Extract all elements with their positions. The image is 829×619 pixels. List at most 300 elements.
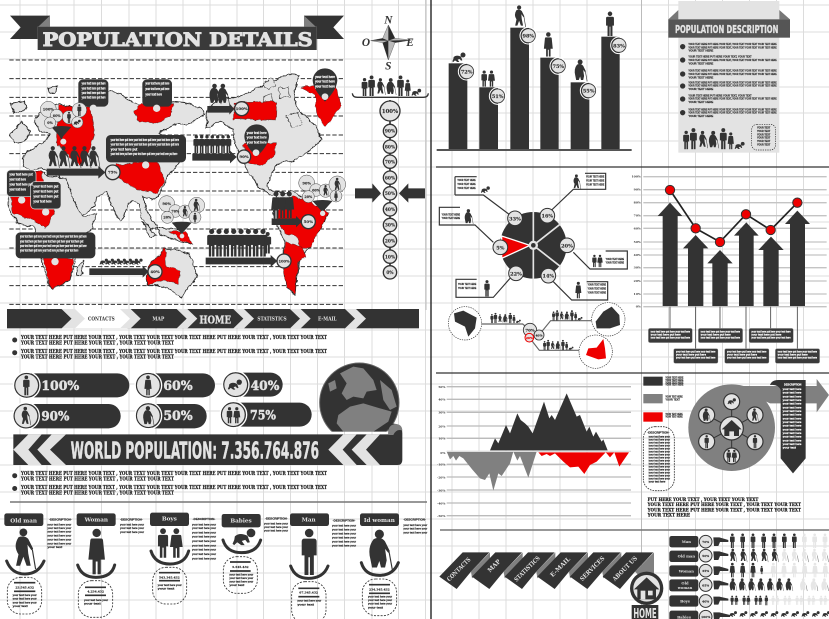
globe bbox=[319, 362, 400, 432]
side descriptions: your text here your bbox=[332, 540, 357, 544]
category labels: Man bbox=[302, 517, 316, 523]
stat numbers: 543.345.432 bbox=[159, 575, 180, 579]
people table: Woman bbox=[678, 569, 694, 573]
side descriptions: your text here your bbox=[47, 534, 72, 538]
pie chart: YOUR TEXT HERE bbox=[588, 292, 606, 295]
pie chart: YOUR TEXT HERE bbox=[442, 214, 460, 217]
callout text: your text here put here bbox=[82, 82, 106, 86]
stat numbers: your text here your bbox=[297, 599, 321, 603]
callout pins bbox=[18, 93, 328, 265]
side descriptions: -DESCRIPTION- bbox=[265, 516, 288, 520]
callout text: your text here put bbox=[33, 195, 59, 199]
mountain chart: 30% bbox=[438, 411, 445, 415]
arrow chart: your text here put here bbox=[778, 354, 808, 357]
callout text: your text here put here your text here put here your text here put here bbox=[111, 152, 177, 156]
arrow chart: 100% bbox=[632, 175, 641, 179]
stat numbers: your text bbox=[229, 583, 244, 587]
arrow chart: your text here put here your text here bbox=[778, 351, 818, 354]
description box: -DESCRIPTION- bbox=[647, 430, 669, 434]
bookmark ribbon: your text here bbox=[783, 409, 802, 413]
population description panel: YOUR TEXT HERE PUT HERE YOUR TEXT, YOUR TEXT YOUR TEXT YOUR TEXT HERE bbox=[688, 69, 777, 73]
arrow chart bbox=[632, 175, 827, 363]
people table: Old man bbox=[678, 555, 695, 559]
pie chart: YOUR TEXT HERE bbox=[588, 284, 606, 287]
arrow chart: your text here put here your text here bbox=[651, 336, 691, 339]
side descriptions: your text here your bbox=[192, 530, 217, 534]
bar chart: 51% bbox=[492, 94, 504, 100]
navigation bar: STATISTICS bbox=[257, 317, 287, 323]
side descriptions: -DESCRIPTION- bbox=[49, 518, 72, 522]
callout text: your text here put bbox=[33, 190, 59, 194]
arrows pointing at 50% bbox=[355, 183, 425, 203]
bookmark ribbon: DESCRIPTION bbox=[784, 383, 801, 387]
bar chart: 98% bbox=[522, 34, 534, 40]
people table: 35% bbox=[702, 569, 709, 573]
text block 2 bbox=[12, 471, 327, 496]
diagonal menu: CONTACTS bbox=[446, 556, 472, 583]
population description panel: YOUR TEXT HERE PUT HERE YOUR TEXT, YOUR TEXT YOUR TEXT YOUR TEXT HERE bbox=[688, 111, 777, 115]
description box: your text here your bbox=[649, 435, 670, 438]
arrow chart: your text here put here your text here bbox=[727, 357, 767, 360]
bookmark ribbon: your text here bbox=[783, 394, 802, 398]
map pointer arrows bbox=[47, 103, 302, 278]
map callouts bbox=[7, 68, 337, 258]
side descriptions bbox=[47, 516, 428, 560]
people table: Old bbox=[681, 581, 689, 585]
population description panel: YOUR TEXT HERE PUT HERE YOUR TEXT, YOUR TEXT YOUR TEXT YOUR TEXT HERE bbox=[688, 45, 777, 49]
people table bbox=[669, 533, 829, 619]
arrow chart: your text here put here bbox=[751, 333, 782, 336]
panel: pie diagram and arrow chart bbox=[439, 173, 827, 368]
bubble icons and labels: 90% bbox=[302, 181, 311, 185]
bookmark ribbon: your text here bbox=[783, 438, 802, 442]
population description panel: YOUR TEXT HERE bbox=[688, 114, 713, 118]
side descriptions: your text here your bbox=[120, 526, 145, 530]
bubble icons and labels: 70% bbox=[171, 209, 180, 213]
arrow chart: your text here put here your text here bbox=[778, 357, 818, 360]
rocker bases bbox=[7, 540, 398, 578]
percentage scale: 70% bbox=[385, 160, 395, 165]
bubble icons and labels: 60% bbox=[312, 188, 321, 192]
stat numbers: 3.345.432 bbox=[232, 565, 249, 569]
callout text: your text here put bbox=[111, 147, 138, 151]
compass: N bbox=[383, 14, 393, 26]
stat numbers: your text here your bbox=[229, 576, 253, 580]
paragraph: PUT HERE YOUR TEXT , YOUR TEXT YOUR TEXT bbox=[648, 497, 759, 502]
map percent labels: 40% bbox=[150, 269, 160, 274]
side descriptions: your text here your bbox=[332, 531, 357, 535]
mountain chart: 0% bbox=[440, 451, 445, 455]
bubble icons and labels: 90% bbox=[162, 202, 171, 206]
side descriptions: your text here your bbox=[192, 522, 217, 526]
bubble icons and labels: 60% bbox=[53, 114, 61, 118]
map percent labels: 100% bbox=[278, 259, 290, 263]
pie chart: 14% bbox=[542, 274, 554, 280]
side descriptions: your text here your bbox=[192, 543, 217, 547]
description box: your text here your bbox=[649, 477, 670, 480]
description box: your text here your bbox=[649, 444, 670, 447]
mountain chart: -40% bbox=[437, 501, 445, 505]
panel: top bar chart and description bbox=[437, 1, 790, 153]
stat numbers: your text here your bbox=[13, 593, 37, 597]
category labels: Boys bbox=[162, 517, 177, 523]
population description panel: YOUR TEXT HERE bbox=[688, 100, 713, 104]
stat numbers: your text here your bbox=[368, 594, 392, 598]
percentage scale: 80% bbox=[385, 145, 395, 150]
map percent labels: 100% bbox=[236, 106, 248, 111]
percentage scale: 20% bbox=[385, 239, 395, 244]
population description panel: YOUR TEXT bbox=[757, 142, 771, 146]
population description panel: YOUR TEXT HERE bbox=[688, 61, 713, 65]
legend: YOUR TEXT HERE bbox=[665, 381, 683, 385]
category labels: Id woman bbox=[364, 518, 395, 524]
pie chart: YOUR TEXT HERE bbox=[588, 288, 606, 291]
bookmark ribbon: your text here bbox=[783, 387, 802, 391]
pie chart: YOUR TEXT HERE bbox=[458, 287, 477, 290]
paragraph: YOUR TEXT HERE PUT HERE YOUR TEXT , YOUR TEXT YOUR TEXT bbox=[647, 507, 802, 512]
bar chart: 55% bbox=[583, 89, 595, 95]
title banner bbox=[10, 16, 344, 51]
mountain chart: 10% bbox=[438, 437, 445, 441]
percentage scale: 90% bbox=[385, 130, 395, 135]
description box: your text here your bbox=[649, 447, 670, 450]
stat numbers: your text here your bbox=[84, 598, 108, 602]
diagonal menu: ABOUT US bbox=[611, 555, 639, 583]
arrow chart: 80% bbox=[634, 201, 641, 205]
population description panel: YOUR TEXT bbox=[757, 132, 771, 136]
bar chart: 72% bbox=[461, 70, 473, 76]
mountain chart: -30% bbox=[437, 488, 445, 492]
description box: your text here your bbox=[649, 465, 670, 468]
side descriptions: your text here your bbox=[264, 529, 289, 533]
bubble icons and labels bbox=[43, 104, 341, 223]
bookmark ribbon: your text here bbox=[783, 416, 802, 420]
percentage pills bbox=[13, 371, 312, 429]
callout text: your text here bbox=[247, 131, 267, 135]
callout text: your text here bbox=[315, 84, 335, 88]
pie chart: YOUR TEXT HERE bbox=[606, 261, 624, 264]
side descriptions: your text here your bbox=[403, 531, 428, 535]
text block 2: YOUR TEXT HERE PUT HERE YOUR TEXT , YOUR TEXT YOUR TEXT bbox=[20, 490, 174, 496]
stat numbers: your text here your bbox=[13, 596, 37, 600]
dashed stat blobs bbox=[7, 557, 397, 619]
callout text: your text here put here bbox=[145, 87, 169, 91]
side descriptions: your text here your bbox=[120, 522, 145, 526]
pie chart: 16% bbox=[541, 214, 553, 220]
callout text: your text here put here bbox=[82, 86, 106, 90]
population description panel: YOUR TEXT bbox=[757, 126, 771, 130]
side descriptions: your text here your bbox=[403, 523, 428, 527]
bar chart bbox=[437, 5, 632, 151]
stat numbers: your text bbox=[158, 587, 175, 591]
stat numbers: your text bbox=[297, 602, 314, 606]
title banner: POPULATION DETAILS bbox=[43, 29, 313, 51]
population description panel: YOUR TEXT HERE PUT HERE YOUR TEXT, YOUR TEXT bbox=[688, 54, 752, 58]
bookmark ribbon bbox=[770, 380, 806, 473]
arrow chart: 10% bbox=[634, 292, 641, 296]
side descriptions: your text here your bbox=[332, 524, 357, 528]
map bubble clusters bbox=[40, 101, 346, 223]
percentage pills: 75% bbox=[250, 407, 276, 423]
callout text: your text here put here your text here put here your text here put here bbox=[111, 143, 179, 147]
callout text: your text here put here your text here put here your text here put here bbox=[20, 244, 87, 248]
arrow chart: 40% bbox=[634, 253, 641, 257]
description box: your text here your bbox=[649, 450, 670, 453]
pie chart: YOUR TEXT HERE bbox=[457, 179, 476, 182]
bubble icons and labels: 0% bbox=[47, 121, 54, 125]
population description panel: YOUR TEXT HERE PUT HERE YOUR TEXT, YOUR TEXT YOUR TEXT YOUR TEXT HERE bbox=[688, 84, 777, 88]
percentage pills: 90% bbox=[41, 409, 70, 425]
description box: your text here your bbox=[649, 471, 670, 474]
side descriptions: your text here your bbox=[192, 539, 217, 543]
side descriptions: your text here your bbox=[120, 530, 145, 534]
paragraph: YOUR TEXT HERE bbox=[647, 512, 690, 517]
legend: YOUR TEXT HERE bbox=[665, 383, 683, 387]
bookmark ribbon: your text here bbox=[783, 435, 802, 439]
bookmark ribbon: your text here bbox=[783, 402, 802, 406]
arrow chart: your text here put here bbox=[727, 354, 758, 357]
navigation bar bbox=[7, 309, 419, 328]
legend: YOUR TEXT HERE bbox=[665, 412, 683, 416]
red countries bbox=[11, 83, 342, 294]
arrow chart: 0% bbox=[636, 305, 641, 309]
panel: navigation and stats bbox=[7, 309, 419, 496]
population description panel: YOUR TEXT HERE PUT HERE YOUR TEXT, YOUR TEXT YOUR TEXT YOUR TEXT HERE bbox=[688, 58, 777, 62]
stat numbers: your text bbox=[84, 602, 101, 606]
panel: population details map bbox=[7, 14, 428, 304]
text block 1: YOUR TEXT HERE PUT HERE YOUR TEXT , YOUR TEXT YOUR TEXT YOUR TEXT HERE PUT HERE YOUR TEXT , YOUR TEXT YOUR TEXT bbox=[20, 349, 327, 355]
people table: 50% bbox=[702, 554, 709, 558]
arrow chart: your text here put here your text here bbox=[676, 351, 716, 354]
category labels: Babies bbox=[230, 519, 252, 525]
pie chart: YOUR TEXT HERE bbox=[586, 176, 605, 179]
description box bbox=[643, 427, 674, 491]
percentage pills: 100% bbox=[41, 378, 80, 394]
panel: mountain chart and icon wheel bbox=[437, 375, 829, 518]
bookmark ribbon: your text here bbox=[783, 427, 802, 431]
legend: YOUR TEXT bbox=[665, 397, 680, 401]
bookmark ribbon: your text here bbox=[783, 405, 802, 409]
arrow chart: your text here put here your text here bbox=[676, 357, 716, 360]
side descriptions: your text here your bbox=[264, 521, 289, 525]
mountain chart: -20% bbox=[437, 475, 445, 479]
side descriptions: your text here your bbox=[47, 530, 72, 534]
stat numbers: your text here your bbox=[13, 600, 37, 604]
percentage scale: 10% bbox=[385, 255, 395, 260]
population description panel: YOUR TEXT HERE bbox=[688, 75, 713, 79]
people table: woman bbox=[677, 586, 693, 590]
percentage scale: 50% bbox=[385, 192, 395, 197]
pie chart: 22% bbox=[510, 271, 522, 277]
side descriptions: your text here your bbox=[192, 535, 217, 539]
country comparison: 40% bbox=[535, 333, 543, 337]
compass: O bbox=[362, 37, 370, 49]
population description panel: YOUR TEXT bbox=[757, 139, 771, 143]
stat numbers: your text here your bbox=[229, 580, 253, 584]
world population banner bbox=[13, 424, 402, 465]
paragraph: YOUR TEXT HERE PUT HERE YOUR TEXT , YOUR TEXT YOUR TEXT bbox=[647, 502, 802, 507]
pie chart: YOUR TEXT HERE bbox=[606, 258, 624, 261]
bookmark ribbon: your text here bbox=[783, 420, 802, 424]
legend: YOUR TEXT HERE bbox=[665, 395, 683, 399]
side descriptions: your text here your bbox=[192, 526, 217, 530]
population description panel: YOUR TEXT HERE bbox=[688, 87, 713, 91]
description box: your text here your bbox=[649, 456, 670, 459]
side descriptions: your text here your bbox=[332, 536, 357, 540]
category labels: Old man bbox=[10, 519, 37, 525]
mountain chart: 40% bbox=[438, 398, 445, 402]
stat numbers: your text here your bbox=[368, 602, 392, 606]
callout text: your text here bbox=[247, 140, 267, 144]
map percent labels: 75% bbox=[108, 170, 118, 175]
text block 1 bbox=[12, 335, 327, 361]
mountain chart: 50% bbox=[438, 385, 445, 389]
side descriptions: your text here your bbox=[332, 544, 357, 548]
percentage scale: 100% bbox=[382, 109, 398, 115]
people group on base bbox=[352, 75, 428, 97]
pie chart: YOUR TEXT HERE bbox=[457, 183, 476, 186]
text block 1: YOUR TEXT HERE PUT HERE YOUR TEXT , YOUR TEXT YOUR TEXT bbox=[20, 340, 174, 346]
population description panel: YOUR TEXT bbox=[757, 136, 771, 140]
side descriptions: your text here your bbox=[192, 556, 217, 560]
world population banner: WORLD POPULATION: 7.356.764.876 bbox=[71, 439, 319, 465]
callout text: your text here bbox=[9, 187, 26, 191]
arrow chart: your text here put here bbox=[701, 333, 731, 336]
arrow chart: your text here put here your text here bbox=[751, 336, 791, 339]
callout text: your text here put bbox=[33, 185, 59, 189]
mountain chart bbox=[437, 385, 631, 518]
description box: your text here your bbox=[649, 468, 670, 471]
country comparison bbox=[448, 303, 625, 368]
side descriptions: -DESCRIPTION- bbox=[193, 517, 215, 521]
text block 2: YOUR TEXT HERE PUT HERE YOUR TEXT , YOUR TEXT YOUR TEXT YOUR TEXT HERE PUT HERE YOUR TEXT , YOUR TEXT YOUR TEXT bbox=[20, 471, 327, 477]
navigation bar: MAP bbox=[152, 317, 164, 323]
arrow chart: your text here put here your text here bbox=[651, 330, 691, 333]
population description panel: YOUR TEXT HERE PUT HERE YOUR TEXT, YOUR TEXT YOUR TEXT YOUR TEXT HERE bbox=[688, 107, 777, 111]
stat numbers bbox=[13, 562, 392, 609]
side descriptions: -DESCRIPTION- bbox=[333, 519, 355, 523]
stat numbers: your text here your bbox=[368, 598, 392, 602]
people table: 70% bbox=[702, 540, 709, 544]
callout text: your text here bbox=[247, 136, 267, 140]
callout text: your text here put here your text here put here your text here bbox=[20, 249, 78, 253]
people table: 40% bbox=[702, 599, 709, 603]
side descriptions: -DESCRIPTION- bbox=[120, 518, 143, 522]
percentage scale: 60% bbox=[385, 176, 395, 181]
callout text: your text here bbox=[9, 177, 26, 181]
population description panel: YOUR TEXT HERE PUT HERE YOUR TEXT, YOUR TEXT bbox=[688, 93, 752, 97]
stat numbers: your text bbox=[368, 605, 383, 609]
side descriptions: your text here your bbox=[47, 522, 72, 526]
percentage scale: 0% bbox=[386, 271, 394, 276]
panel: people categories bbox=[4, 513, 428, 619]
bookmark ribbon: your text here bbox=[783, 413, 802, 417]
percentage pills: 60% bbox=[163, 378, 193, 394]
arrow chart: your text here put here your text here bbox=[701, 336, 741, 339]
legend: YOUR TEXT HERE bbox=[665, 378, 683, 382]
home button bbox=[630, 572, 663, 619]
bookmark ribbon: your text here bbox=[783, 431, 802, 435]
pie chart: 5% bbox=[496, 245, 505, 251]
bubble icons and labels: 20% bbox=[304, 195, 313, 199]
callout text: your text here bbox=[315, 80, 335, 84]
stat numbers: your text here your bbox=[229, 573, 253, 577]
stat numbers: your text here your bbox=[158, 583, 182, 587]
description box: your text here your bbox=[649, 459, 670, 462]
diagonal menu: E-MAIL bbox=[549, 555, 573, 579]
population description panel: YOUR TEXT HERE bbox=[688, 49, 713, 53]
side descriptions: -DESCRIPTION- bbox=[403, 518, 426, 522]
pie chart: 20% bbox=[561, 243, 573, 249]
side descriptions: your text here your bbox=[332, 527, 357, 531]
pie chart: YOUR TEXT HERE bbox=[586, 184, 605, 187]
navigation bar: CONTACTS bbox=[88, 317, 115, 323]
side descriptions: your text here your bbox=[47, 542, 72, 546]
population description panel: YOUR TEXT bbox=[757, 129, 771, 133]
arrow chart: 30% bbox=[634, 266, 641, 270]
side descriptions: your text here your bbox=[192, 552, 217, 556]
compass bbox=[362, 14, 414, 72]
callout text: your text here bbox=[145, 92, 162, 96]
map percent labels: 50% bbox=[304, 219, 313, 224]
description box: your text here your bbox=[649, 474, 670, 477]
stat numbers: your text bbox=[13, 604, 28, 608]
bubble icons and labels: 20% bbox=[163, 216, 172, 220]
arrow chart: your text here put here bbox=[676, 354, 707, 357]
description box: your text here your bbox=[649, 441, 670, 444]
callout text: your text here put here your text here put here your text here put here bbox=[111, 138, 179, 142]
description box: your text here your bbox=[649, 462, 670, 465]
side descriptions: your text here your bbox=[403, 527, 428, 531]
pie chart: YOUR TEXT HERE bbox=[442, 217, 460, 220]
side descriptions: your text here your bbox=[47, 538, 72, 542]
paragraph bbox=[647, 497, 802, 517]
text block 2: YOUR TEXT HERE PUT HERE YOUR TEXT , YOUR TEXT YOUR TEXT YOUR TEXT HERE PUT HERE YOUR TEXT , YOUR TEXT YOUR TEXT bbox=[20, 485, 327, 491]
arrow chart: your text here put here your text here bbox=[701, 330, 741, 333]
mountain chart: -10% bbox=[437, 463, 445, 467]
pie chart: YOUR TEXT HERE bbox=[457, 187, 476, 190]
arrow chart: your text here put here your text here bbox=[727, 351, 767, 354]
arrow chart: 60% bbox=[634, 226, 641, 230]
navigation bar: HOME bbox=[199, 313, 231, 327]
percentage scale bbox=[380, 100, 400, 279]
compass: E bbox=[405, 37, 414, 49]
map percent labels: 90% bbox=[239, 154, 249, 159]
callout text: your text here put here bbox=[145, 82, 169, 86]
world map bbox=[8, 74, 328, 297]
arrow chart: 20% bbox=[634, 279, 641, 283]
side descriptions: your text bbox=[47, 545, 62, 549]
description box: your text here your bbox=[649, 453, 670, 456]
bookmark ribbon: your text here bbox=[783, 391, 802, 395]
people table: Man bbox=[682, 540, 691, 544]
bubble icons and labels: 100% bbox=[43, 108, 54, 112]
bookmark ribbon: your text here bbox=[783, 398, 802, 402]
population description panel bbox=[668, 1, 790, 153]
arrow chart: 70% bbox=[634, 214, 641, 218]
people table: Boys bbox=[680, 599, 690, 603]
callout text: your text here bbox=[33, 200, 52, 204]
arrow chart: your text here put here bbox=[651, 333, 681, 336]
diagonal menu: SERVICES bbox=[579, 555, 606, 583]
text block 1: YOUR TEXT HERE PUT HERE YOUR TEXT , YOUR TEXT YOUR TEXT bbox=[20, 355, 174, 361]
bar chart: 75% bbox=[552, 64, 564, 70]
map people groups bbox=[49, 84, 294, 265]
callout text: your text here put bbox=[9, 172, 33, 176]
stat numbers: 23.545.432 bbox=[15, 585, 34, 589]
country comparison: 20% bbox=[526, 336, 533, 340]
callout text bbox=[9, 75, 335, 253]
